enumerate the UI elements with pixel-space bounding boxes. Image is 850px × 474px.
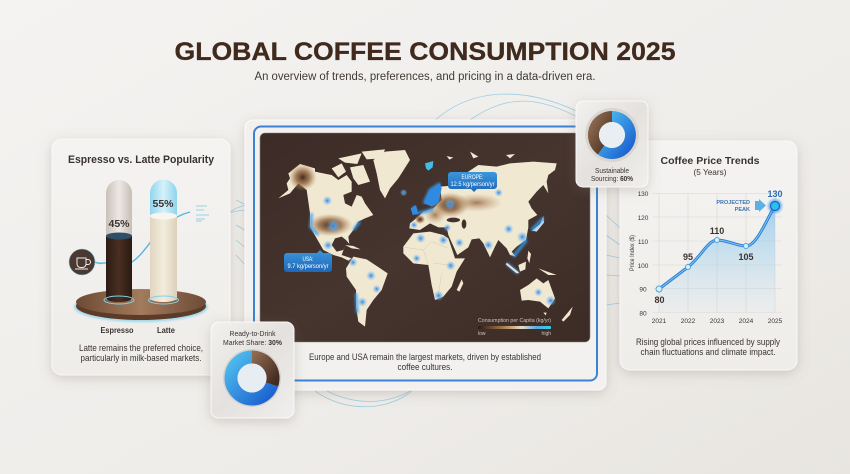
inland seas [420,218,466,232]
bar labels: Latte [157,325,175,335]
panel: espresso vs latte popularity [52,139,230,375]
callout: Europe: EUROPE: [462,175,484,181]
card label: Sustainable [595,168,629,175]
bar: espresso 45%: 45% [108,218,130,230]
country borders [405,242,452,295]
map caption [309,352,541,373]
data spots [322,189,407,307]
donut: market share 30% [223,349,281,407]
projected peak annotation: PROJECTED [716,200,750,206]
pedestal [74,289,208,322]
blue highlighted islands and Scandinavia [411,161,442,215]
icon: coffee cup [69,212,190,275]
callout: USA [284,250,332,272]
y axis labels: 110 [638,239,649,246]
panel heading: Espresso vs. Latte Popularity [68,154,215,166]
Southeast Asia glow [507,263,518,273]
panel heading: (5 Years) [694,167,727,177]
decorative connecting swooshes [132,94,620,407]
value labels: 95 [683,252,693,262]
y axis labels [638,191,649,318]
projected peak annotation: PEAK [735,207,750,213]
callout: USA: 9.7 kg/person/yr [288,264,328,270]
card label: Sourcing: 60% [591,176,634,183]
map legend: low [478,331,486,337]
y axis labels: 120 [638,215,649,222]
x axis labels [652,318,783,325]
projected peak annotation [716,199,766,213]
world map: Americas [278,149,410,327]
landmasses [403,232,573,322]
world map: Eurasia [409,152,557,257]
value labels: 110 [710,226,724,236]
data spots [412,233,556,306]
data spots [410,188,528,250]
blue Europe glow [413,183,543,257]
bar labels [100,325,175,335]
subtitle: An overview of trends, preferences, and pricing in a data-driven era. [254,71,596,83]
panel heading: Coffee Price Trends [660,155,760,167]
bar labels: Espresso [100,325,134,335]
callout: Europe [448,172,497,192]
card label [223,329,282,347]
panel caption: Latte remains the preferred choice, [79,343,203,354]
card: sustainable sourcing donut [576,101,648,187]
mini chart lines [196,206,209,221]
panel: coffee price trends [620,141,797,370]
panel caption [636,337,780,358]
map legend: Consumption per Capita (kg/yr) [478,318,551,324]
bar: latte 55% [148,180,178,304]
data points [656,238,748,292]
x axis labels: 2021 [652,318,667,325]
value labels: 130 [767,189,783,199]
y axis title: Price Index ($) [629,235,636,271]
heat zones [415,192,503,224]
bar: espresso 45% [104,180,134,304]
y axis labels: 130 [638,191,649,198]
title: GLOBAL COFFEE CONSUMPTION 2025 [174,38,676,66]
y axis labels: 90 [639,286,647,294]
y axis labels: 80 [639,310,647,318]
peak marker [768,199,782,213]
map legend [478,318,551,337]
x axis labels: 2022 [681,318,696,325]
x axis labels: 2025 [768,318,783,325]
panel caption: chain fluctuations and climate impact. [640,347,776,358]
x axis labels: 2023 [710,318,725,325]
callout: USA: USA: [302,257,314,263]
line chart [629,189,783,325]
area fill [659,206,775,312]
y axis labels: 100 [638,263,649,270]
card: ready-to-drink donut [211,322,294,418]
card label: Market Share: 30% [223,338,282,347]
heat zones [289,164,353,236]
map background [260,133,590,342]
x axis labels: 2024 [739,318,754,325]
callout: Europe: 12.5 kg/person/yr [450,182,495,188]
panel caption: Rising global prices influenced by supply [636,337,780,348]
landmass [409,152,557,257]
value labels: 80 [654,295,665,305]
panel: world map [245,120,606,390]
world map: Africa and Oceania [403,232,573,322]
trend line [659,206,775,289]
panel caption [79,343,203,364]
map caption: Europe and USA remain the largest markets, driven by established [309,352,541,363]
card label: Ready-to-Drink [230,329,276,338]
donut: sourcing 60% [585,108,639,162]
map caption: coffee cultures. [398,362,452,373]
card label [591,168,634,183]
bar: latte 55%: 55% [152,198,174,210]
map legend: high [542,331,551,337]
coastal glow [311,213,360,313]
value labels: 105 [738,252,754,262]
panel heading [660,155,760,177]
panel caption: particularly in milk-based markets. [80,353,202,364]
value labels [654,189,783,305]
landmasses [278,149,410,327]
gridlines [653,193,782,312]
